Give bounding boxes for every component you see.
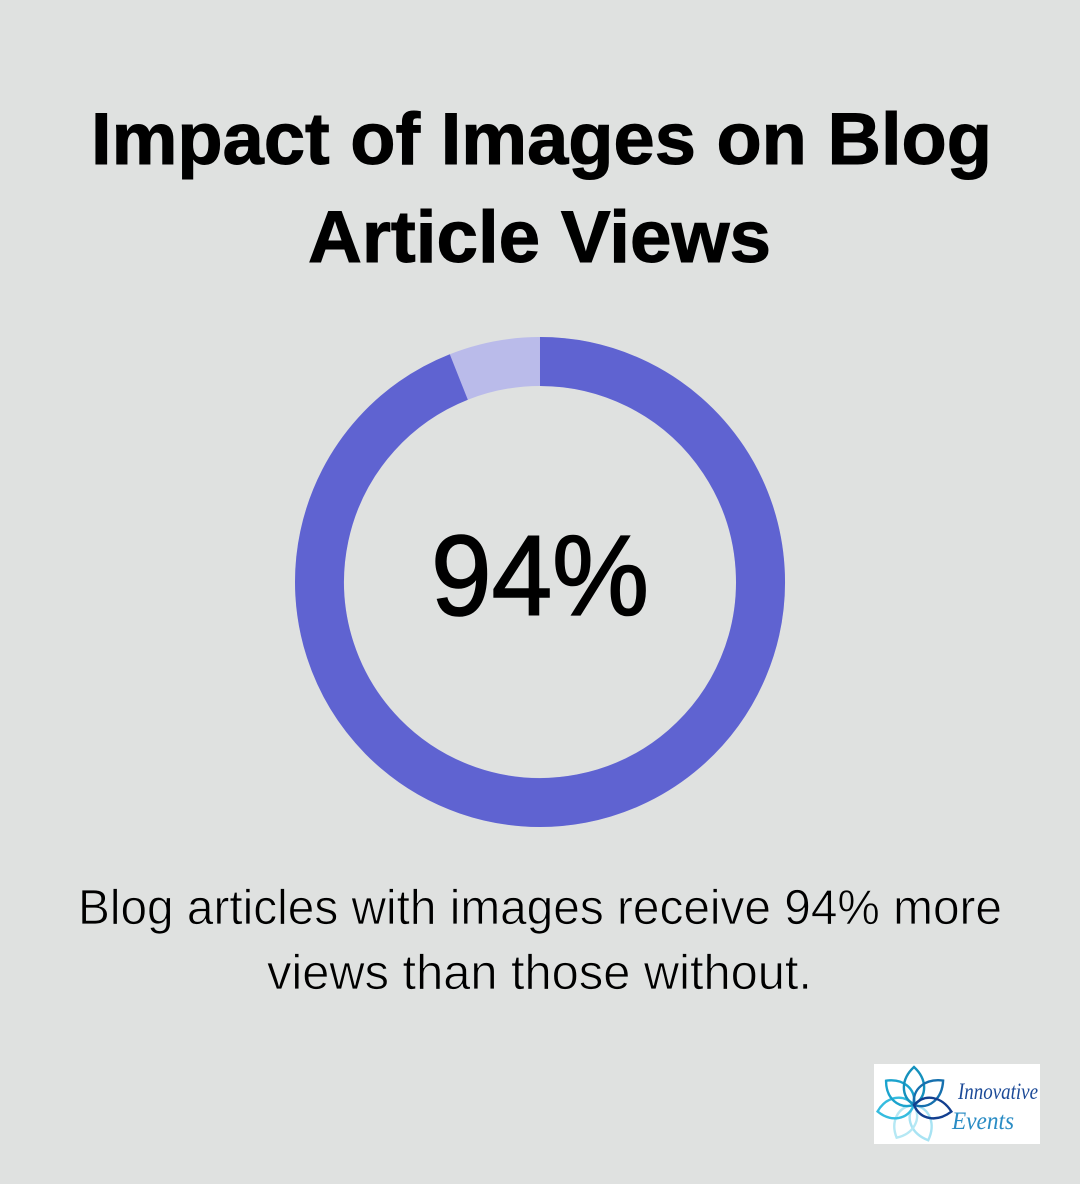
description text: views than those without. xyxy=(267,946,812,1000)
donut value label: 94% xyxy=(431,513,649,640)
logo wordmark xyxy=(951,1079,1038,1135)
donut value arc xyxy=(320,362,761,803)
logo wordmark: Innovative xyxy=(957,1079,1038,1104)
title: Article Views xyxy=(308,197,771,278)
description text: Blog articles with images receive 94% more xyxy=(78,881,1002,935)
description text xyxy=(78,881,1002,1000)
title xyxy=(91,99,992,278)
logo: Innovative Events xyxy=(874,1064,1040,1144)
logo wordmark: Events xyxy=(951,1108,1014,1135)
title: Impact of Images on Blog xyxy=(91,99,992,180)
icon: lotus flower xyxy=(876,1067,953,1144)
donut chart: 94% xyxy=(320,362,761,803)
donut track: remaining segment xyxy=(320,362,760,802)
